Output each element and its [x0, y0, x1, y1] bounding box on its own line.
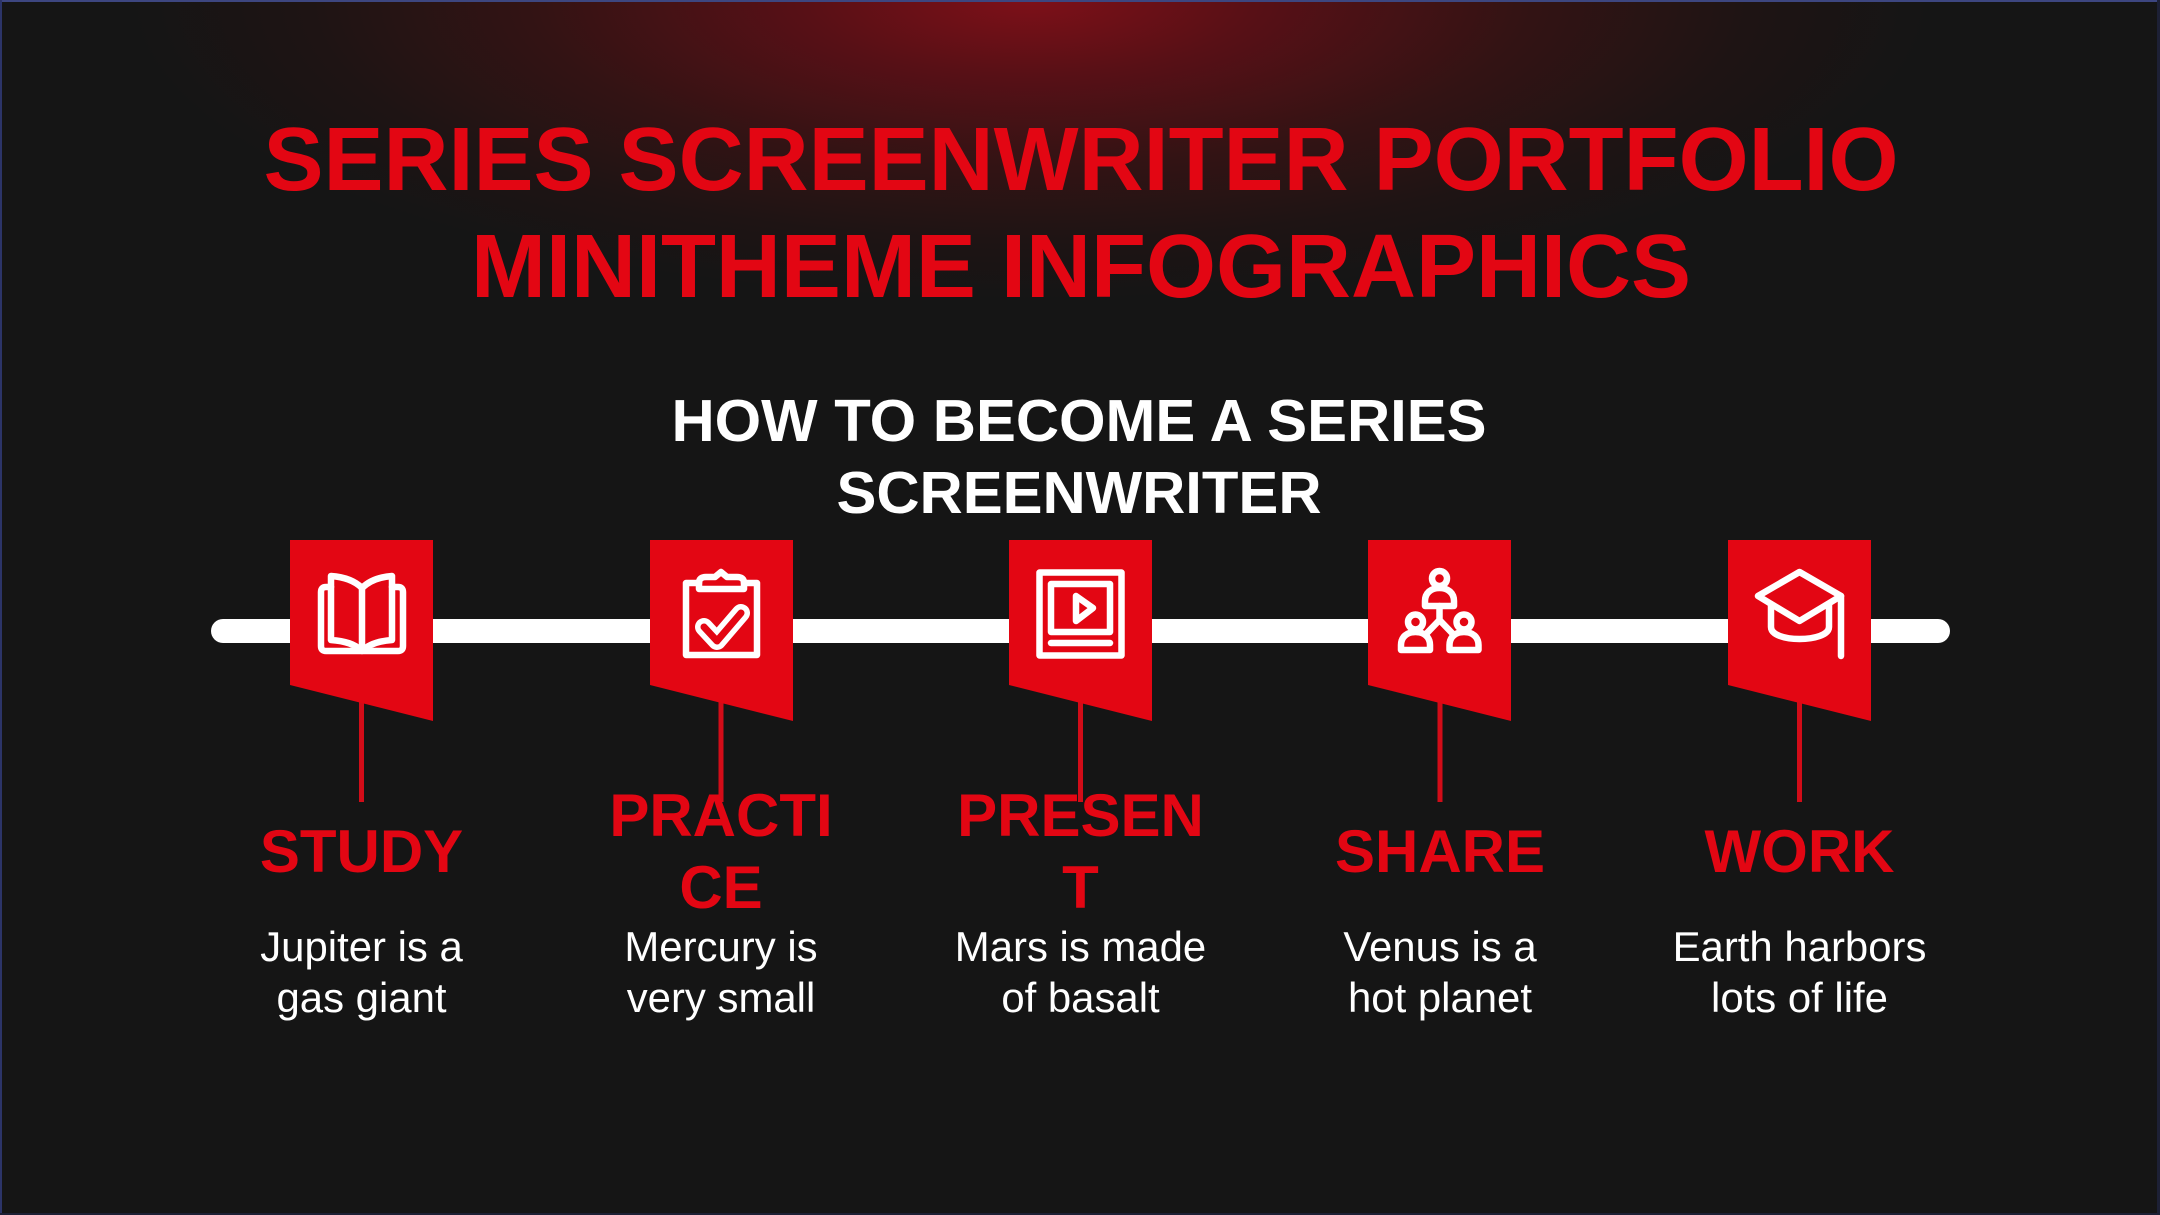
connector line: [1438, 700, 1442, 802]
label: CE: [679, 854, 763, 921]
description: [1343, 923, 1537, 1021]
description: Jupiter is a: [260, 923, 463, 970]
description: Mars is made: [955, 923, 1206, 970]
description: [624, 923, 818, 1021]
description: very small: [627, 974, 815, 1021]
icon: team hierarchy: [1401, 571, 1478, 650]
banner: [1728, 540, 1871, 721]
title: MINITHEME INFOGRAPHICS: [471, 217, 1691, 317]
description: [260, 923, 463, 1021]
description: hot planet: [1348, 974, 1532, 1021]
banner: [650, 540, 793, 721]
connector line: [359, 700, 364, 802]
label: WORK: [1705, 818, 1894, 885]
icon: video player: [1040, 572, 1122, 656]
timeline bar: [211, 619, 1950, 643]
step 5: work: [1673, 540, 1926, 1021]
banner: [1368, 540, 1511, 721]
description: [955, 923, 1206, 1021]
connector line: [1078, 700, 1083, 802]
label: STUDY: [260, 818, 463, 885]
description: Mercury is: [624, 923, 818, 970]
step 1: study: [260, 540, 463, 1021]
title: [263, 110, 1899, 317]
banner: [290, 540, 433, 721]
banner: [1009, 540, 1152, 721]
description: Earth harbors: [1673, 923, 1926, 970]
label: [957, 782, 1204, 921]
description: gas giant: [276, 974, 447, 1021]
title: SERIES SCREENWRITER PORTFOLIO: [263, 110, 1899, 210]
description: lots of life: [1711, 974, 1888, 1021]
step 3: present: [955, 540, 1206, 1021]
label: SHARE: [1335, 818, 1545, 885]
label: PRESEN: [957, 782, 1204, 849]
description: of basalt: [1001, 974, 1160, 1021]
icon: clipboard with check: [686, 572, 757, 655]
connector line: [718, 700, 724, 802]
subtitle: HOW TO BECOME A SERIES: [671, 387, 1487, 454]
subtitle: [671, 387, 1487, 526]
icon: graduation cap: [1758, 572, 1841, 656]
description: Venus is a: [1343, 923, 1537, 970]
label: PRACTI: [609, 782, 833, 849]
icon: open book: [321, 576, 403, 651]
connector line: [1797, 700, 1802, 802]
step 4: share: [1335, 540, 1545, 1021]
subtitle: SCREENWRITER: [836, 459, 1322, 526]
label: [609, 782, 833, 921]
description: [1673, 923, 1926, 1021]
step 2: practice: [609, 540, 833, 1021]
label: T: [1062, 854, 1099, 921]
